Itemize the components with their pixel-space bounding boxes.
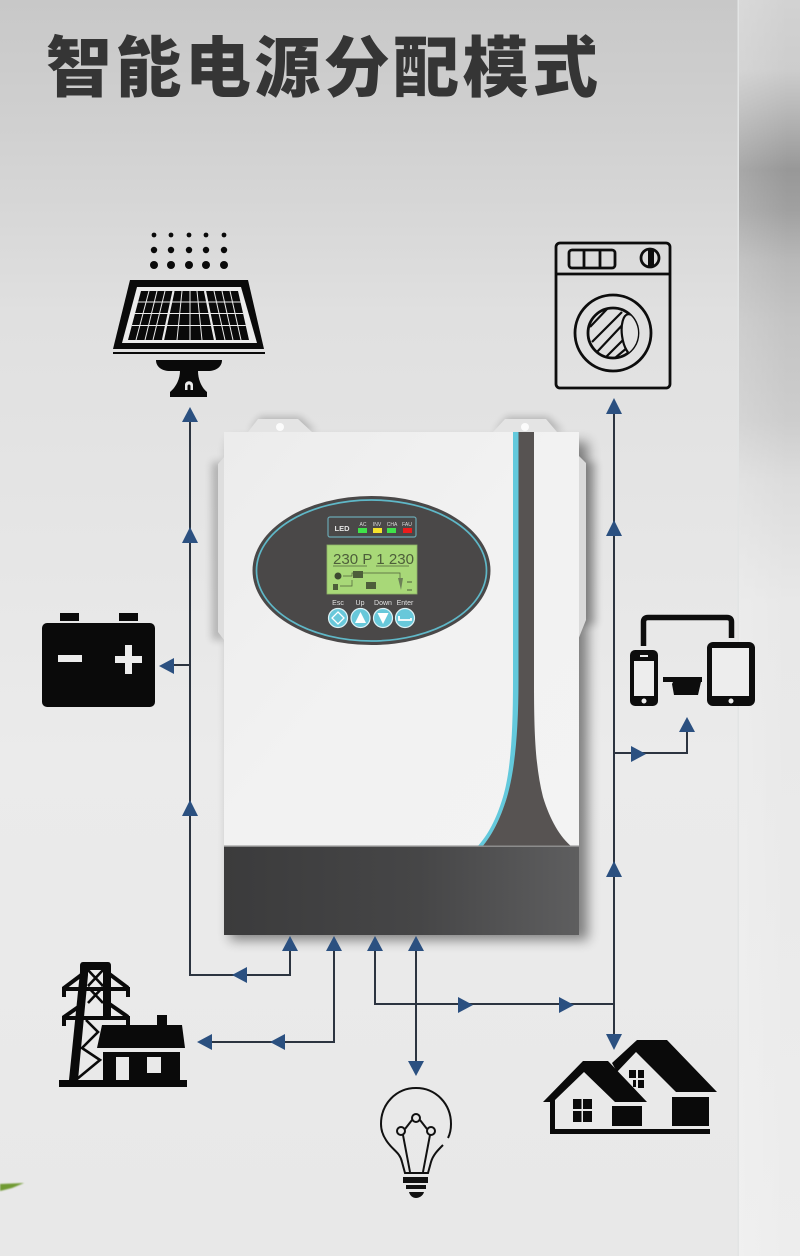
icon: houses <box>543 1040 717 1134</box>
icon: light bulb <box>381 1088 451 1198</box>
icon: washing machine <box>556 243 670 388</box>
inverter swoosh stripe <box>477 432 572 847</box>
icon: power tower and house <box>59 962 187 1087</box>
inverter <box>212 417 596 940</box>
control panel <box>252 496 490 645</box>
arrows <box>159 398 695 1076</box>
button labels: Down <box>374 600 392 607</box>
inverter shadow <box>212 417 596 940</box>
icon: solar panel <box>113 233 265 397</box>
inverter base <box>224 847 579 935</box>
inverter front cover <box>224 432 579 847</box>
button labels: Enter <box>397 600 414 607</box>
LED indicator box: FAU <box>402 522 412 528</box>
LCD screen <box>327 545 417 594</box>
LED indicator box: CHA <box>387 522 398 528</box>
LED indicator box: INV <box>373 522 382 528</box>
button labels: Up <box>356 600 365 607</box>
button labels: Esc <box>332 600 344 607</box>
icon: devices <box>630 618 755 706</box>
inverter side brackets <box>218 455 586 640</box>
LCD screen: 230 P 1 230 <box>333 551 414 568</box>
icon: battery <box>42 613 155 707</box>
LED indicator box: LED <box>334 524 350 533</box>
button labels <box>332 600 414 607</box>
buttons <box>328 608 414 628</box>
LED indicator box <box>328 517 416 537</box>
inverter mounting tabs <box>248 419 557 432</box>
title: 智能电源分配模式 <box>46 31 598 105</box>
connection lines <box>165 405 687 1068</box>
LED indicator box: AC <box>360 522 367 528</box>
